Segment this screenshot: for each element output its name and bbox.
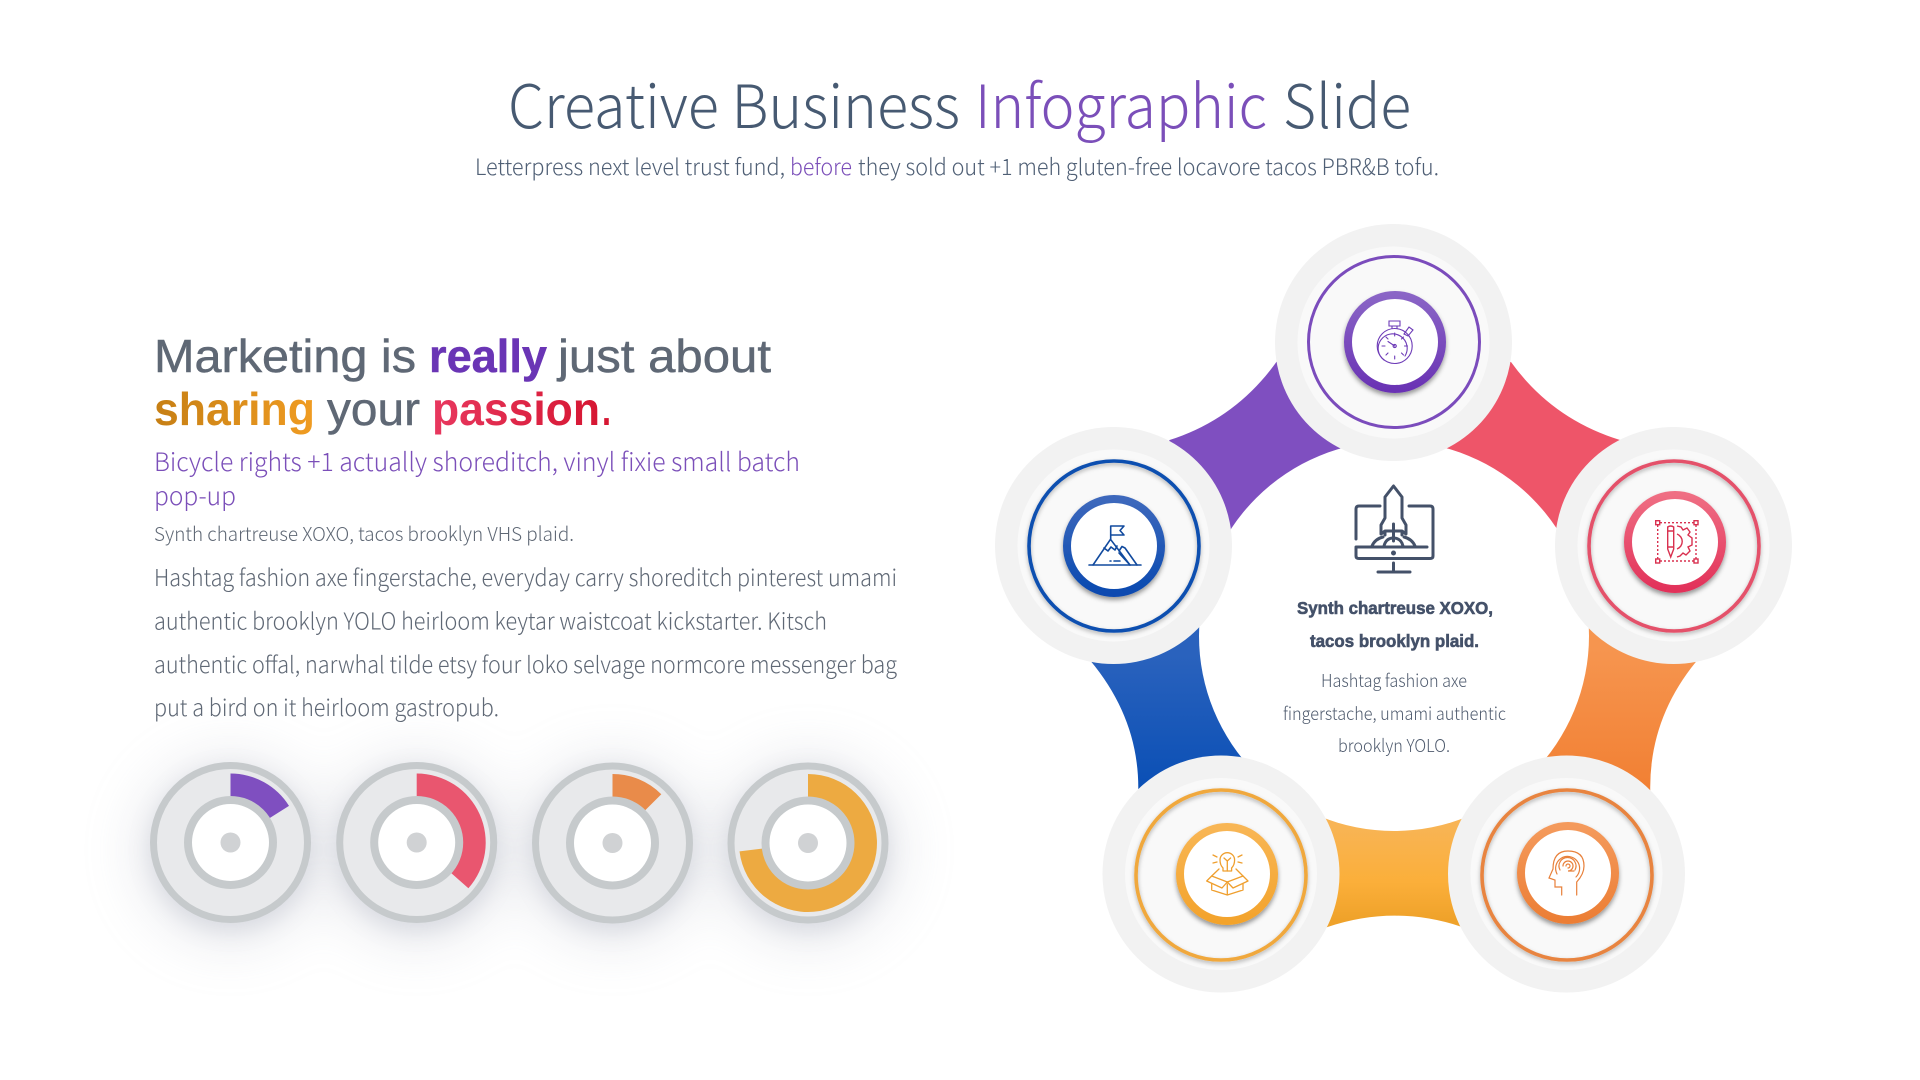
subtitle: they sold out +1 meh gluten-free locavore tacos PBR&B tofu. [858,150,1439,182]
icon: mountain flag [1089,526,1141,565]
icon: lightbulb in box [1207,853,1248,895]
icon: pencil and gear [1656,521,1698,563]
gauge: purple [154,766,308,920]
body paragraph: put a bird on it heirloom gastropub. [154,689,499,723]
left heading: sharing [154,383,315,435]
subtitle: Letterpress next level trust fund, [475,150,785,182]
body paragraph: Hashtag fashion axe fingerstache, everyday carry shoreditch pinterest umami [154,559,897,593]
connector: yellow [1167,636,1567,1038]
node: orange head [1448,756,1685,992]
central text: brooklyn YOLO. [1338,733,1450,758]
purple subheading [154,442,800,513]
gauge: red [340,766,494,920]
left heading: really [429,330,547,382]
left heading: Marketing is [154,330,416,382]
central heading: tacos brooklyn plaid. [1310,631,1479,651]
icon: rocket launching from monitor [1356,486,1433,572]
gauge shadows [132,752,906,948]
left heading: just about [556,330,771,382]
title: Creative Business [508,59,960,146]
connector: purple [1114,279,1481,636]
left heading [154,330,771,435]
short description: Synth chartreuse XOXO, tacos brooklyn VHS plaid. [154,518,574,547]
body paragraph [154,559,897,723]
body paragraph: authentic offal, narwhal tilde etsy four loko selvage normcore messenger bag [154,646,897,680]
icon: stopwatch [1377,321,1413,364]
left heading: passion [432,383,600,435]
node: yellow box [1102,756,1340,992]
subtitle [475,150,1439,182]
node: red design [1555,427,1792,664]
connector: red [1394,342,1674,636]
title: Slide [1283,59,1411,146]
central heading: Synth chartreuse XOXO, [1297,598,1493,618]
gauge: yellow [731,766,885,920]
connector: orange [1394,545,1760,902]
left heading: . [602,383,611,435]
gauge: orange [536,766,690,920]
purple subheading: Bicycle rights +1 actually shoreditch, vinyl fixie small batch [154,442,800,479]
central heading [1297,598,1493,651]
subtitle: before [790,150,852,182]
icon: head with maze [1549,851,1584,895]
title: Infographic [975,59,1267,146]
purple subheading: pop-up [154,476,236,513]
central text: Hashtag fashion axe [1321,668,1467,693]
node: blue mountain [995,427,1232,664]
connector: blue [995,471,1394,874]
body paragraph: authentic brooklyn YOLO heirloom keytar waistcoat kickstarter. Kitsch [154,602,827,636]
title [508,59,1411,146]
left heading: your [327,383,420,435]
node: purple stopwatch [1275,224,1512,461]
central text: fingerstache, umami authentic [1283,701,1506,726]
central disc [1199,441,1589,831]
central text [1283,668,1506,758]
